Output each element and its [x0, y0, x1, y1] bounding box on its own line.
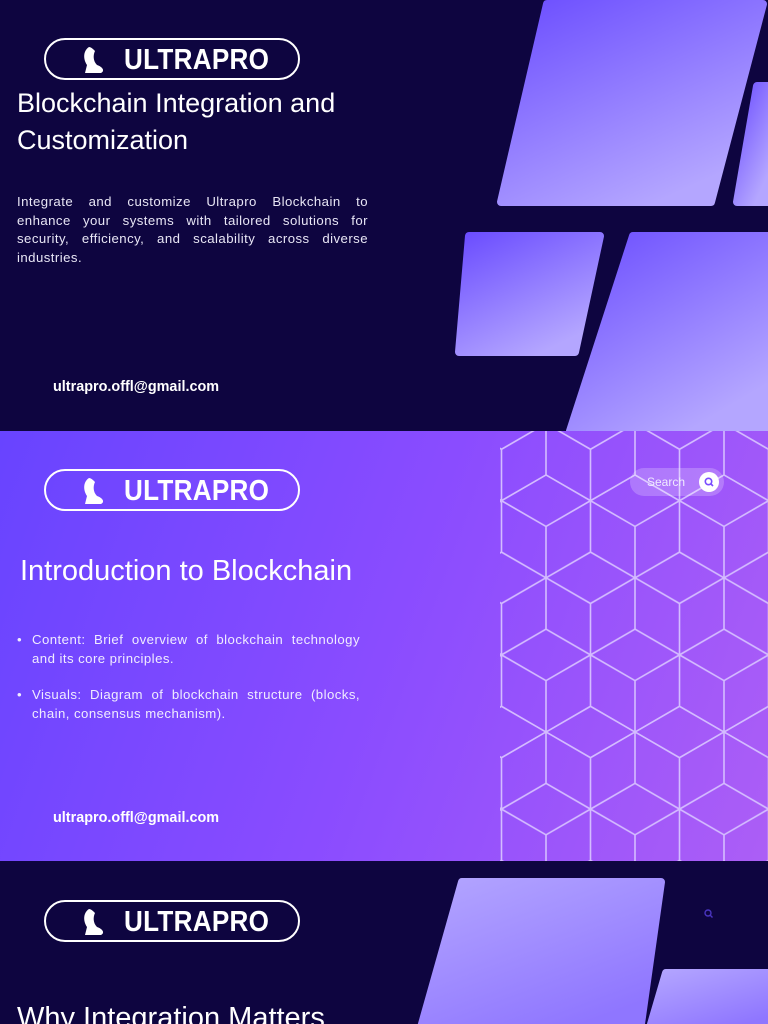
email: ultrapro.offl@gmail.com [53, 378, 219, 395]
logo [44, 38, 300, 80]
decorative shapes [418, 878, 768, 1024]
section 3: why integration matters [0, 861, 768, 1024]
logo [44, 469, 300, 511]
description: enhance your systems with tailored solutions for [17, 213, 368, 228]
title: Blockchain Integration and [17, 88, 335, 118]
bullet list: and its core principles. [32, 651, 174, 666]
cube pattern [500, 431, 768, 861]
email: ultrapro.offl@gmail.com [53, 809, 219, 826]
description: security, efficiency, and scalability across diverse [17, 231, 368, 246]
search bar [630, 468, 724, 496]
logo: ULTRAPRO [124, 44, 269, 76]
icon: small search [704, 909, 713, 918]
bullet list: • [17, 632, 22, 647]
section 1: cover [0, 0, 768, 431]
description: industries. [17, 250, 82, 265]
title: Introduction to Blockchain [20, 555, 352, 587]
description [17, 194, 368, 265]
bullet list [17, 632, 360, 721]
logo: ULTRAPRO [124, 906, 269, 938]
title: Customization [17, 125, 188, 155]
bullet list: • [17, 687, 22, 702]
logo: ULTRAPRO [124, 475, 269, 507]
decorative parallelogram shapes [455, 0, 768, 431]
bullet list: Content: Brief overview of blockchain technology [32, 632, 360, 647]
search bar: Search [647, 475, 685, 489]
logo [44, 900, 300, 942]
bullet list: Visuals: Diagram of blockchain structure (blocks, [32, 687, 360, 702]
bullet list: chain, consensus mechanism). [32, 706, 226, 721]
title [17, 88, 335, 155]
icon: search [699, 472, 719, 492]
section 2: introduction [0, 431, 768, 861]
description: Integrate and customize Ultrapro Blockchain to [17, 194, 368, 209]
